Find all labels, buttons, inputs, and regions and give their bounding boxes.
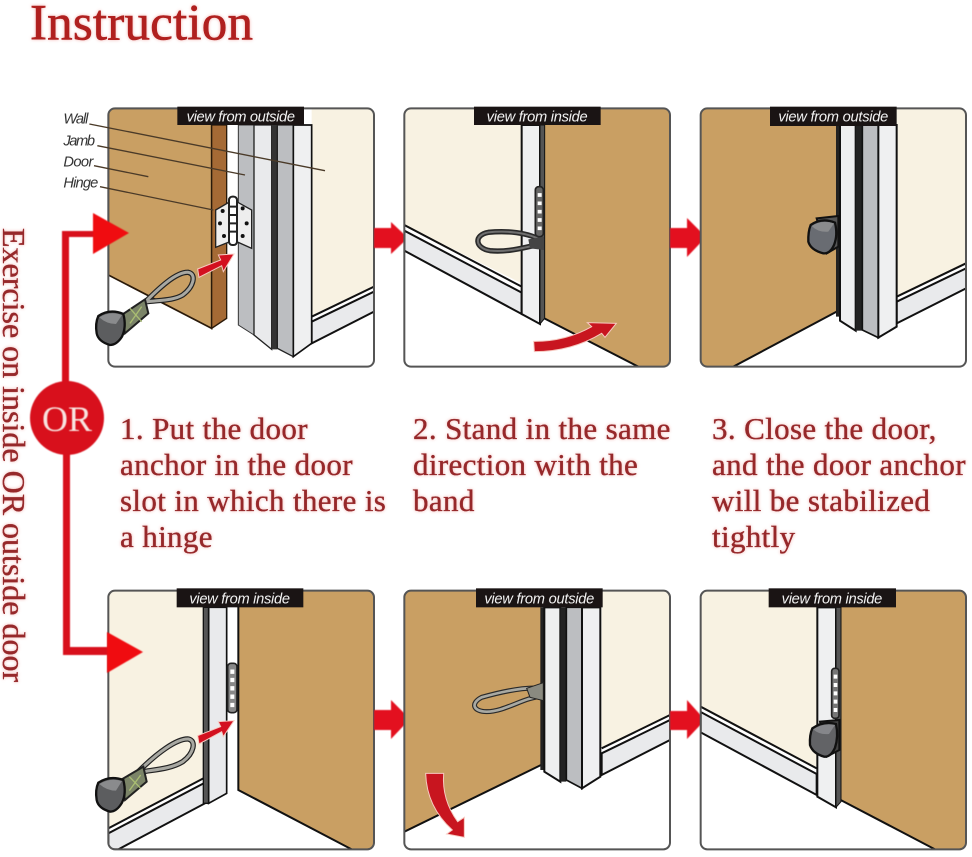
arrowhead: to top row bbox=[93, 213, 129, 254]
view label bbox=[474, 107, 601, 125]
text: step 1: 1. Put the door bbox=[120, 411, 308, 446]
text: step 3: 3. Close the door, bbox=[712, 411, 937, 446]
view label: view from inside bbox=[487, 109, 588, 125]
arrow: step 1 to step 2 bbox=[374, 222, 408, 254]
text: step 1: slot in which there is bbox=[120, 483, 386, 518]
icon: hinge bbox=[216, 197, 252, 248]
view label: view from outside bbox=[187, 109, 295, 125]
door part labels and leader lines: Hinge bbox=[63, 175, 98, 191]
icon: anchor block stabilized bbox=[808, 216, 838, 253]
text: step 3: and the door anchor bbox=[712, 447, 966, 482]
panel: step 3 outside bbox=[701, 107, 966, 367]
text: step 3: will be stabilized bbox=[712, 483, 930, 518]
panel: step 2 outside bbox=[404, 588, 670, 849]
view label: view from inside bbox=[189, 591, 290, 607]
arrow: curved door swing bbox=[426, 773, 464, 837]
arrow: insert anchor bbox=[198, 721, 234, 744]
arrow: step 2 to step 3 bbox=[670, 218, 706, 257]
icon: door anchor with loop bbox=[96, 739, 193, 812]
icon: hinge edge bbox=[535, 187, 543, 237]
view label: view from outside bbox=[484, 591, 594, 607]
door part labels and leader lines: Jamb bbox=[62, 134, 95, 150]
badge: OR bbox=[30, 381, 104, 455]
view label bbox=[769, 588, 896, 607]
text: step 3: tightly bbox=[712, 519, 796, 554]
arrowhead: to bottom row bbox=[107, 632, 143, 673]
icon: anchor loop in door slot bbox=[478, 232, 544, 251]
view label: view from inside bbox=[782, 591, 882, 607]
arrow: curved push bbox=[534, 323, 616, 352]
text: step 3 bbox=[712, 411, 966, 554]
text: step 2: 2. Stand in the same bbox=[413, 411, 671, 446]
badge: OR: OR bbox=[42, 399, 92, 439]
arrow: bottom step 1 to step 2 bbox=[374, 700, 410, 739]
view label: view from outside bbox=[778, 109, 888, 125]
arrow: insert anchor bbox=[198, 254, 234, 277]
icon: anchor loop in door slot bbox=[475, 683, 543, 712]
panel: step 3 inside bbox=[701, 588, 966, 849]
text: step 1 bbox=[120, 411, 386, 554]
text: step 2: direction with the bbox=[413, 447, 638, 482]
text: step 1: a hinge bbox=[120, 519, 213, 554]
connector: exercise inside or outside bbox=[30, 213, 143, 673]
text: step 2 bbox=[413, 411, 671, 518]
icon: hinge edge bbox=[832, 668, 839, 718]
text: step 2: band bbox=[413, 483, 475, 518]
door part labels and leader lines bbox=[62, 112, 325, 210]
door part labels and leader lines: Wall bbox=[63, 112, 89, 128]
door part labels and leader lines: Door bbox=[63, 155, 94, 171]
icon: anchor block stabilized bbox=[810, 720, 839, 757]
panel: step 1 outside bbox=[62, 107, 374, 367]
icon: door anchor with loop bbox=[96, 272, 193, 345]
view label bbox=[177, 588, 303, 607]
icon: hinge edge bbox=[228, 663, 237, 713]
panel: step 2 inside bbox=[404, 107, 670, 367]
panel: step 1 inside bbox=[96, 588, 374, 849]
text: step 1: anchor in the door bbox=[120, 447, 353, 482]
arrow: bottom step 2 to step 3 bbox=[670, 700, 705, 739]
